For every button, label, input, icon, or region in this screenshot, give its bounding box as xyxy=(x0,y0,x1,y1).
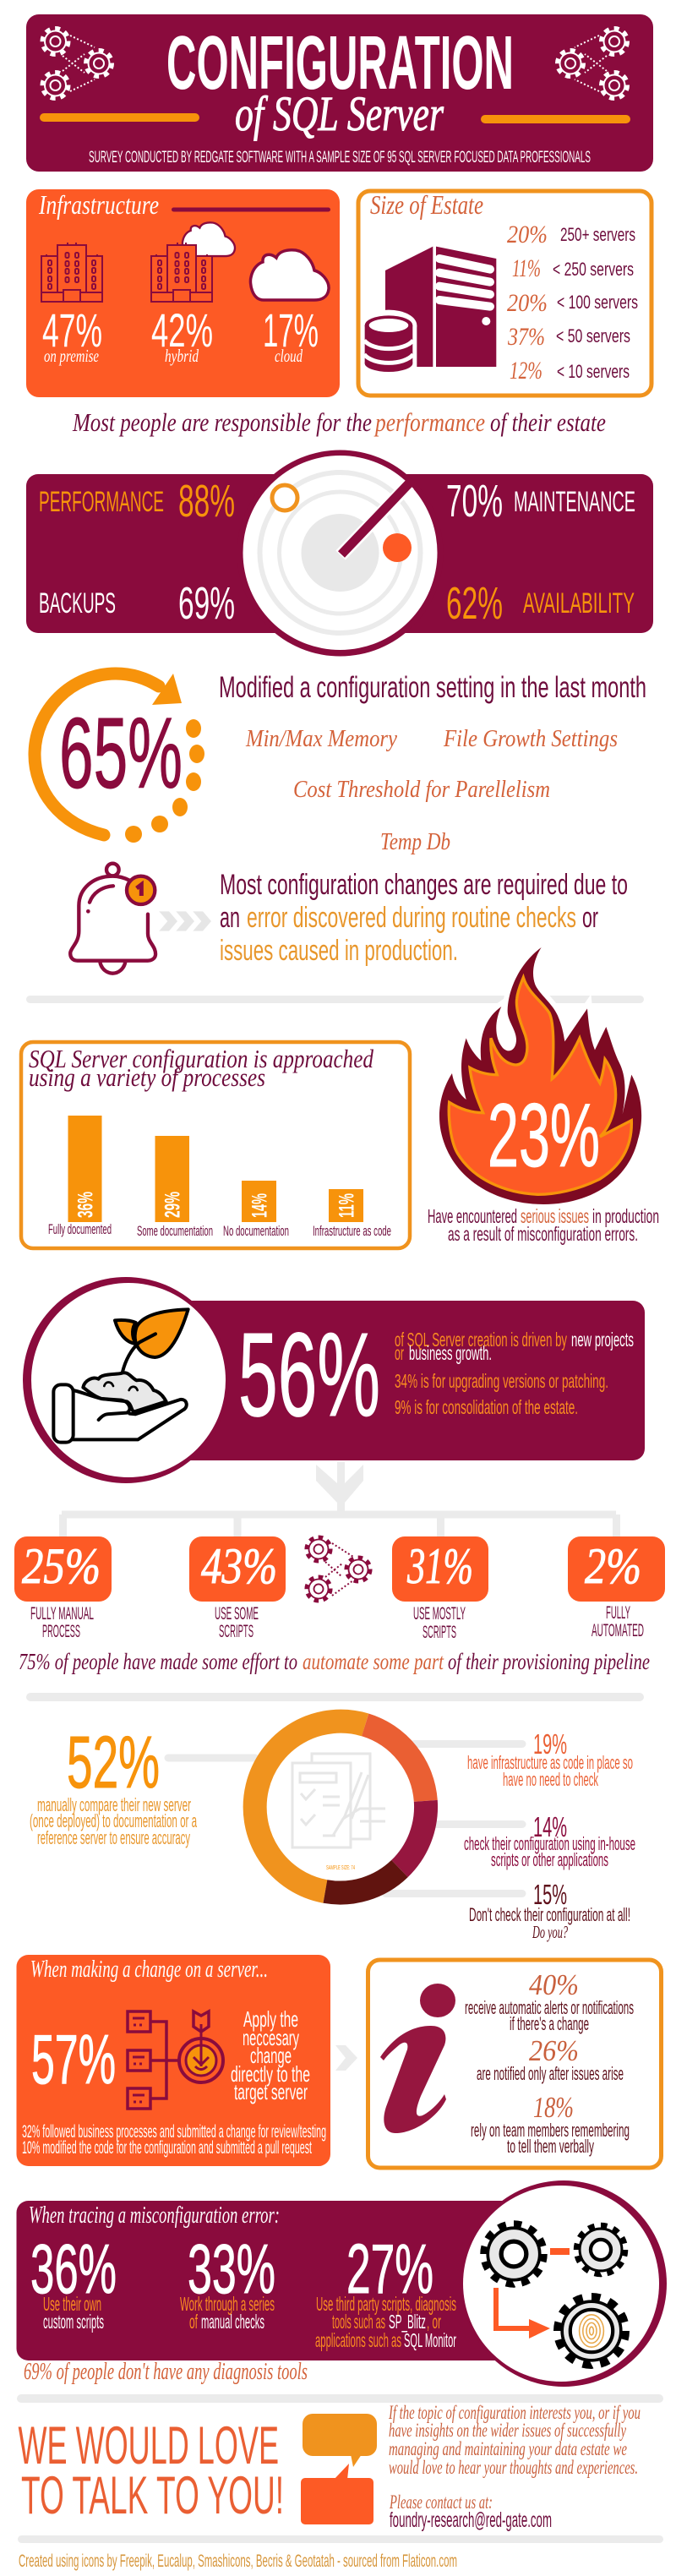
stat: 19% infrastructure as code: 19% xyxy=(533,1728,567,1760)
list: estate sizes: < 50 servers xyxy=(556,325,630,347)
text: drivers xyxy=(395,1329,634,1418)
box: fully manual: PROCESS xyxy=(42,1622,80,1641)
text: reasons for change: an xyxy=(220,902,240,934)
stat: 27%: 27% xyxy=(346,2229,433,2308)
bar: infrastructure as code xyxy=(313,1189,391,1239)
sample size note: SAMPLE SIZE: 74 xyxy=(326,1865,355,1871)
list: estate sizes: 12% xyxy=(510,357,542,385)
stat: 40% xyxy=(465,1968,634,2034)
stat: 57%: 57% xyxy=(31,2020,116,2098)
icon: boxes to target xyxy=(128,2011,223,2109)
list: estate sizes xyxy=(507,221,638,385)
stat: 33%: manual checks xyxy=(201,2311,264,2333)
text: reasons for change: issues caused in production. xyxy=(220,935,458,967)
list: settings: Min/Max Memory xyxy=(245,725,397,752)
panel: making a change xyxy=(17,1955,330,2166)
arrow: to automation tree xyxy=(62,1462,617,1538)
text: serious issues: Have encountered xyxy=(428,1205,517,1227)
list: estate sizes: < 100 servers xyxy=(557,292,638,313)
bar: fully documented xyxy=(48,1116,112,1237)
bar: some documentation: 29% xyxy=(161,1192,184,1218)
stat: maintenance xyxy=(446,476,635,527)
heading: using a variety of processes xyxy=(29,1062,265,1092)
icon: hand with plant xyxy=(23,1277,229,1483)
list: settings xyxy=(245,725,618,855)
header banner xyxy=(26,14,653,172)
list: estate sizes: 20% xyxy=(507,221,548,248)
text: invitation xyxy=(388,2402,641,2532)
stat: backups xyxy=(39,578,235,629)
stat: availability xyxy=(446,578,635,629)
icon: diagnosis gears circle xyxy=(461,2180,667,2387)
accent bar right xyxy=(481,115,630,123)
stat: 40%: if there's a change xyxy=(510,2013,589,2034)
icon: on premise building xyxy=(41,243,102,302)
bar: no documentation: 14% xyxy=(248,1193,272,1218)
icon: notification bell xyxy=(70,864,211,974)
box: fully manual: 25% xyxy=(22,1538,101,1594)
stat: 33%: Work through a series xyxy=(180,2293,275,2315)
stat: 33%: 33% xyxy=(188,2229,275,2308)
icon: gears middle xyxy=(307,1537,370,1601)
stat: performance: 88% xyxy=(178,476,235,527)
panel: tracing errors: SQL Monitor xyxy=(404,2329,456,2351)
stat: 52% manual comparison: reference server to ensure accuracy xyxy=(37,1827,190,1848)
heading: Size of Estate xyxy=(370,189,483,220)
panel: infrastructure xyxy=(26,189,340,397)
bar: fully documented: 36% xyxy=(74,1192,98,1218)
text: apply directly xyxy=(231,2006,310,2104)
panel: size of estate xyxy=(358,189,651,396)
panel: notifications xyxy=(368,1960,661,2168)
stat: 26%: 26% xyxy=(529,2034,579,2067)
stat: 14% in-house scripts: 14% xyxy=(533,1811,567,1842)
stat: 15% no checks xyxy=(469,1879,630,1942)
heading: automation effort xyxy=(19,1649,650,1674)
heading: When making a change on a server... xyxy=(30,1956,268,1983)
stat: 27%: SP_Blitz xyxy=(389,2311,426,2333)
stat: 15% no checks: Do you? xyxy=(532,1922,568,1942)
box: use mostly scripts: SCRIPTS xyxy=(422,1623,456,1642)
bar: infrastructure as code: Infrastructure as code xyxy=(313,1223,391,1239)
subtitle script: of SQL Server xyxy=(235,86,444,141)
box: use some scripts: USE SOME xyxy=(215,1604,259,1624)
stat: hybrid xyxy=(151,303,213,366)
box: fully manual: FULLY MANUAL xyxy=(30,1604,94,1624)
text: serious issues xyxy=(428,1205,659,1245)
stat: 27%: , or xyxy=(427,2311,441,2333)
accent bar left xyxy=(40,113,199,122)
stat: performance: PERFORMANCE xyxy=(39,486,164,518)
panel: processes bar chart xyxy=(21,1042,410,1248)
text: other approaches xyxy=(22,2122,326,2158)
list: estate sizes: < 10 servers xyxy=(557,361,630,382)
list: estate sizes: 20% xyxy=(507,289,548,317)
icon: gears left xyxy=(42,29,112,98)
stat: cloud xyxy=(263,303,319,366)
box: use mostly scripts: USE MOSTLY xyxy=(413,1604,466,1624)
stat: on premise: 47% xyxy=(42,303,102,357)
stat: cloud: cloud xyxy=(275,346,303,366)
list: settings: Temp Db xyxy=(380,828,450,855)
stat: 26% xyxy=(477,2034,624,2084)
icon: info i xyxy=(380,1984,455,2133)
stat: 52% manual comparison: 52% xyxy=(67,1722,160,1804)
heading: responsibility: performance xyxy=(373,407,485,437)
heading: call to action xyxy=(19,2416,284,2525)
icon: 65% progress ring xyxy=(35,674,204,843)
text: apply directly: directly to the xyxy=(231,2061,310,2087)
heading: call to action: WE WOULD LOVE xyxy=(19,2416,279,2475)
stat: 27%: tools such as xyxy=(332,2311,385,2333)
box: use mostly scripts: 31% xyxy=(406,1538,473,1594)
text: apply directly: Apply the xyxy=(243,2006,298,2032)
icon: gears right xyxy=(558,29,627,98)
panel: responsibilities xyxy=(26,450,653,656)
stat: 27% xyxy=(315,2229,456,2351)
box: use some scripts xyxy=(189,1536,286,1641)
bar: fully documented: Fully documented xyxy=(48,1221,112,1237)
stat: 33%: of xyxy=(189,2311,198,2333)
list: settings: File Growth Settings xyxy=(443,725,618,752)
bar: some documentation: Some documentation xyxy=(137,1223,213,1239)
heading: Infrastructure xyxy=(38,189,159,220)
stat: 36% xyxy=(30,2229,117,2333)
text: apply directly: target server xyxy=(234,2079,308,2104)
stat: on premise xyxy=(42,303,102,366)
list: estate sizes: 11% xyxy=(512,254,541,282)
icon: speech bubbles xyxy=(301,2414,377,2524)
stat: 19% infrastructure as code xyxy=(467,1728,633,1790)
stat: 36%: custom scripts xyxy=(43,2311,104,2333)
stat: availability: 62% xyxy=(446,578,503,629)
box: use some scripts: SCRIPTS xyxy=(219,1622,254,1641)
stat: performance xyxy=(39,476,235,527)
stat: 36%: 36% xyxy=(30,2229,117,2308)
heading xyxy=(29,1044,373,1092)
panel: server creation drivers xyxy=(23,1277,645,1483)
heading: automation effort: automate some part xyxy=(303,1649,444,1674)
list: settings: Cost Threshold for Parellelism xyxy=(293,776,550,803)
stat: 14% in-house scripts xyxy=(464,1811,635,1870)
text: other approaches: 32% followed business processes and submitted a change for review/testing xyxy=(22,2122,326,2142)
list: estate sizes: 250+ servers xyxy=(560,224,635,245)
panel: tracing errors: Use third party scripts, diagnosis xyxy=(316,2293,456,2315)
icon: flame with 23% xyxy=(439,947,641,1204)
stat: backups: BACKUPS xyxy=(39,587,116,619)
text: no diagnosis tools: 69% of people don't have any diagnosis tools xyxy=(24,2358,308,2385)
text: drivers: or xyxy=(395,1342,404,1364)
icon: hybrid cloud and building xyxy=(151,222,235,302)
stat: 23%: 23% xyxy=(488,1084,600,1186)
stat: 18%: to tell them verbally xyxy=(507,2136,594,2157)
text: drivers: business growth. xyxy=(409,1342,492,1364)
stat: 18% xyxy=(471,2091,630,2157)
stat: hybrid: hybrid xyxy=(165,346,199,366)
box: fully manual xyxy=(14,1536,112,1641)
radar circle xyxy=(237,450,443,656)
panel: tracing errors xyxy=(17,2180,667,2387)
icon: cloud xyxy=(250,250,329,300)
stat: 40%: 40% xyxy=(529,1968,579,2001)
stat: 18%: 18% xyxy=(533,2091,574,2124)
stat: cloud: 17% xyxy=(263,303,319,357)
heading: responsibility xyxy=(72,407,606,437)
text: serious issues: serious issues xyxy=(521,1205,589,1227)
bar: infrastructure as code: 11% xyxy=(335,1193,358,1218)
stat: 36%: Use their own xyxy=(43,2293,101,2315)
heading: automation effort: 75% of people have made some effort to xyxy=(19,1649,297,1674)
box: fully automated: 2% xyxy=(585,1538,641,1594)
stat: 52% manual comparison xyxy=(30,1722,197,1848)
heading: responsibility: Most people are responsible for the xyxy=(72,407,372,437)
text: reasons for change xyxy=(220,869,628,967)
stat: backups: 69% xyxy=(178,578,235,629)
stat: 52% manual comparison: manually compare their new server xyxy=(37,1794,191,1815)
heading: SQL Server configuration is approached xyxy=(29,1044,373,1073)
text: reasons for change: or xyxy=(582,902,598,934)
arrow: chevron xyxy=(335,2045,357,2071)
icon: server and database xyxy=(361,245,496,374)
stat: 15% no checks: 15% xyxy=(533,1879,567,1910)
box: fully automated xyxy=(568,1536,665,1640)
list: estate sizes: < 250 servers xyxy=(553,259,634,280)
stat: 33% xyxy=(180,2229,275,2333)
bar: no documentation: No documentation xyxy=(223,1223,289,1239)
stat: on premise: on premise xyxy=(44,346,99,366)
text: other approaches: 10% modified the code for the configuration and submitted a pull request xyxy=(22,2138,312,2158)
text: apply directly: change xyxy=(250,2043,292,2068)
box: fully automated: FULLY xyxy=(606,1603,630,1623)
text: apply directly: neccesary xyxy=(243,2025,299,2050)
stat: 27%: applications such as xyxy=(315,2329,401,2351)
stat: 56%: 56% xyxy=(238,1307,380,1441)
box: use mostly scripts xyxy=(392,1536,488,1642)
stat: 52% manual comparison: (once deployed) to documentation or a xyxy=(30,1810,197,1831)
bar: some documentation xyxy=(137,1136,213,1239)
box: use some scripts: 43% xyxy=(201,1538,277,1594)
heading: call to action: TO TALK TO YOU! xyxy=(21,2466,284,2525)
heading: responsibility: of their estate xyxy=(490,407,606,437)
text: invitation: Please contact us at: xyxy=(389,2491,493,2513)
list: estate sizes: 37% xyxy=(507,323,545,351)
heading: When tracing a misconfiguration error: xyxy=(29,2202,280,2229)
stat: maintenance: 70% xyxy=(446,476,503,527)
icon: checklist xyxy=(292,1754,385,1847)
donut chart: configuration checks xyxy=(168,1722,522,1893)
heading rule xyxy=(172,208,330,211)
stat: hybrid: 42% xyxy=(151,303,213,357)
stat: 65%: 65% xyxy=(59,697,183,810)
bar: no documentation xyxy=(223,1181,289,1239)
